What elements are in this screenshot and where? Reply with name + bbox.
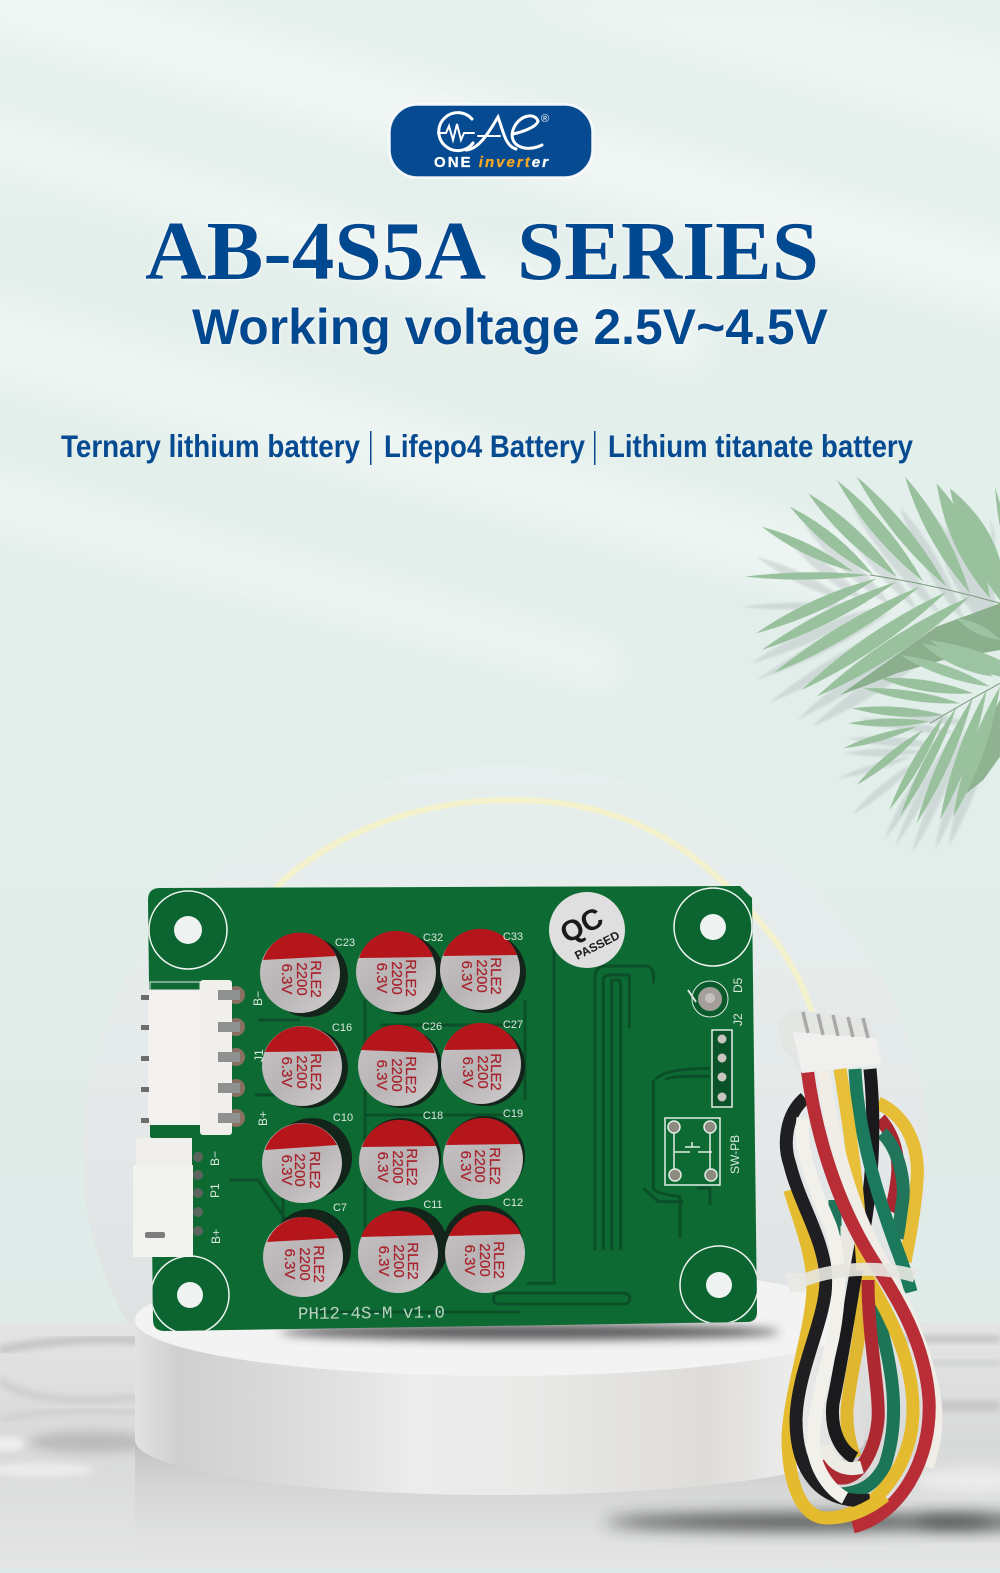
capacitor designators: C12	[503, 1197, 523, 1209]
capacitor designators: C16	[332, 1022, 352, 1034]
capacitor C12: 2200	[476, 1243, 493, 1277]
green lower wire	[840, 1300, 894, 1494]
capacitor C19: RLE2	[486, 1147, 503, 1185]
switch footprint	[665, 1118, 720, 1185]
capacitor C11: 2200	[390, 1244, 407, 1278]
registered mark: ®	[541, 113, 549, 125]
cable tie	[785, 1269, 915, 1292]
capacitor C10: 2200	[291, 1153, 308, 1187]
capacitor C10	[262, 1118, 352, 1203]
capacitor C27	[441, 1023, 525, 1106]
floor	[0, 1322, 1000, 1568]
subtitle: Working voltage 2.5V~4.5V	[192, 299, 829, 355]
green front wire	[855, 1069, 911, 1292]
silkscreen labels right: J2	[731, 1013, 745, 1026]
floor shadow right of cable	[915, 1515, 1000, 1529]
large white connector	[141, 980, 240, 1137]
J2 header	[712, 1030, 732, 1107]
battery types row	[61, 428, 913, 465]
capacitor C16: 6.3V	[278, 1057, 295, 1087]
board traces right	[493, 937, 710, 1304]
capacitor C16: RLE2	[307, 1053, 324, 1091]
large connector solder pins	[227, 986, 245, 1127]
capacitor C12: 6.3V	[461, 1245, 478, 1275]
capacitor C23	[260, 933, 348, 1017]
logo emblem	[438, 113, 542, 151]
capacitor designators: C18	[423, 1110, 443, 1122]
capacitor C7	[263, 1209, 351, 1297]
main title	[145, 205, 819, 298]
capacitor C18: 2200	[389, 1150, 406, 1184]
capacitor C7: 2200	[296, 1247, 313, 1281]
main title: AB-4S5A	[145, 205, 486, 298]
capacitor C32: 6.3V	[373, 963, 390, 993]
capacitor C26: 6.3V	[373, 1060, 390, 1090]
yellow bottom overlap	[827, 1496, 885, 1518]
capacitor C23: 6.3V	[278, 964, 295, 994]
palm leaf shadow	[740, 507, 995, 853]
mounting hole bottom left	[151, 1256, 229, 1334]
capacitor C10: 6.3V	[278, 1155, 295, 1185]
capacitor C23: RLE2	[307, 960, 324, 998]
mounting hole bottom right	[680, 1246, 758, 1324]
capacitor C12	[443, 1205, 525, 1293]
capacitor C16	[262, 1026, 348, 1108]
capacitor C11: 6.3V	[375, 1246, 392, 1276]
logo badge	[390, 104, 592, 178]
inner red wire	[823, 1280, 878, 1478]
main title: SERIES	[517, 205, 819, 298]
black centre wire	[832, 1069, 873, 1458]
inner white wire	[825, 1445, 862, 1469]
capacitor C23: 2200	[293, 962, 310, 996]
battery type 3: Lithium titanate battery	[608, 428, 913, 464]
capacitor designators: C11	[423, 1199, 443, 1211]
inner green stub	[828, 1200, 842, 1236]
capacitor C26	[358, 1025, 442, 1108]
capacitor designators: C7	[333, 1202, 347, 1214]
capacitor C33	[440, 929, 526, 1013]
floor shadow under cable	[605, 1514, 995, 1530]
capacitor C27: RLE2	[487, 1053, 504, 1091]
capacitor C7: 6.3V	[281, 1249, 298, 1279]
capacitor C26: 2200	[388, 1058, 405, 1092]
QC passed sticker: QC	[555, 902, 609, 950]
inner white stub	[840, 1226, 854, 1270]
capacitor C26: RLE2	[402, 1056, 419, 1094]
capacitor C11	[358, 1207, 448, 1293]
QC passed sticker	[549, 892, 625, 968]
capacitor C18: 6.3V	[374, 1152, 391, 1182]
battery type 1: Ternary lithium battery	[61, 428, 360, 464]
capacitor designators: C32	[423, 932, 443, 944]
capacitor designators: C26	[422, 1021, 442, 1033]
silkscreen labels left: P1	[208, 1183, 222, 1198]
capacitor C33: 2200	[473, 959, 490, 993]
white left wire	[802, 1118, 845, 1498]
LED	[688, 981, 728, 1017]
backdrop circle	[82, 765, 928, 1535]
capacitor C32: 2200	[388, 961, 405, 995]
capacitor C7: RLE2	[310, 1245, 327, 1283]
silkscreen labels left: J1	[252, 1049, 266, 1062]
mounting hole top right	[674, 888, 752, 966]
capacitor C33: 6.3V	[458, 961, 475, 991]
capacitor designators: C10	[333, 1112, 353, 1124]
capacitor designators: C27	[503, 1019, 523, 1031]
wire harness	[778, 1009, 936, 1527]
black left wire	[786, 1098, 870, 1500]
silkscreen labels left: B−	[251, 991, 265, 1006]
back yellow wire	[878, 1103, 917, 1262]
silkscreen labels left: B+	[209, 1229, 223, 1244]
palm leaf	[745, 477, 1000, 823]
logo wordmark: ONE inverter	[434, 154, 549, 171]
yellow front wire	[840, 1069, 863, 1270]
capacitor designators: C23	[335, 937, 355, 949]
capacitor C11: RLE2	[404, 1242, 421, 1280]
capacitor C18	[359, 1118, 441, 1201]
white front wire	[823, 1068, 936, 1467]
capacitor C16: 2200	[293, 1055, 310, 1089]
small white connector	[133, 1138, 203, 1257]
white connector housing	[778, 1009, 882, 1073]
podium reflection	[135, 1440, 867, 1568]
capacitor designators	[332, 931, 523, 1214]
back red wire	[880, 1119, 898, 1211]
capacitor C33: RLE2	[487, 957, 504, 995]
capacitor C32: RLE2	[402, 959, 419, 997]
back green wire	[882, 1133, 903, 1238]
yellow outer loop	[788, 1190, 913, 1518]
podium	[135, 1264, 865, 1495]
silkscreen labels left: B−	[208, 1151, 222, 1166]
capacitor C18: RLE2	[403, 1148, 420, 1186]
capacitor C27: 2200	[474, 1055, 491, 1089]
capacitor C19: 2200	[471, 1149, 488, 1183]
QC passed sticker: PASSED	[572, 928, 622, 963]
capacitor C32	[356, 931, 444, 1015]
background light streaks	[0, 0, 1000, 695]
mounting pads	[149, 888, 758, 1334]
capacitor C10: RLE2	[306, 1151, 323, 1189]
red front wire	[807, 1068, 929, 1527]
capacitor C27: 6.3V	[459, 1057, 476, 1087]
silkscreen labels left	[208, 991, 270, 1244]
board version label: PH12-4S-M v1.0	[298, 1303, 445, 1325]
circuit board	[133, 886, 758, 1334]
silkscreen labels right	[728, 977, 745, 1174]
board shadow on podium	[280, 1324, 780, 1340]
silkscreen labels right: D5	[731, 977, 745, 993]
capacitor C19	[443, 1116, 525, 1199]
board traces left and centre	[230, 1000, 525, 1312]
mounting hole top left	[149, 891, 227, 969]
capacitor designators: C33	[503, 931, 523, 943]
cream wire behind board	[275, 800, 813, 1015]
battery type 2: Lifepo4 Battery	[384, 428, 585, 464]
silkscreen labels right: SW-PB	[728, 1135, 742, 1174]
capacitor C12: RLE2	[490, 1241, 507, 1279]
silkscreen labels left: B+	[256, 1111, 270, 1126]
inner yellow wire	[847, 1280, 862, 1458]
capacitor C19: 6.3V	[457, 1151, 474, 1181]
capacitor designators: C19	[503, 1108, 523, 1120]
